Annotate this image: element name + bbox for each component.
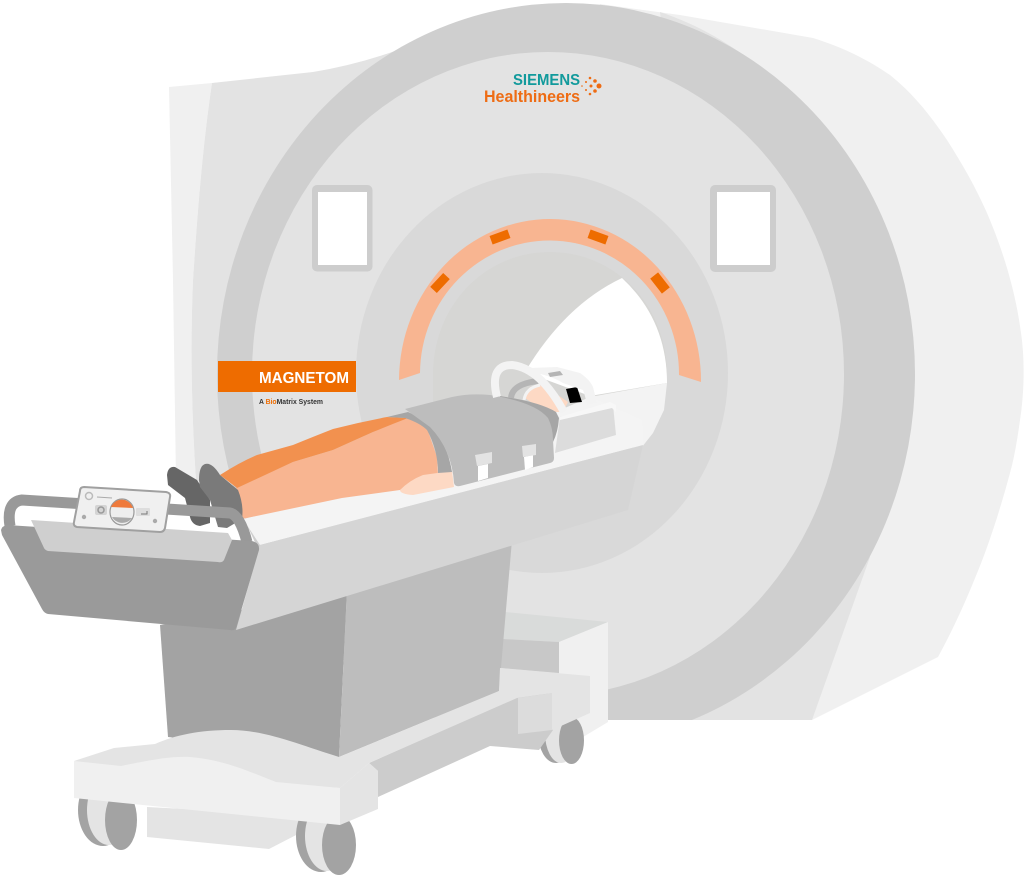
patient table top xyxy=(236,397,643,630)
left wheel xyxy=(78,774,137,850)
tray inset xyxy=(31,520,232,562)
socks xyxy=(167,464,242,528)
Siemens Healthineers logo: Healthineers xyxy=(484,87,580,106)
remote control xyxy=(74,487,170,532)
drape band xyxy=(387,412,452,473)
coil slot xyxy=(548,371,563,377)
arm side xyxy=(369,693,553,797)
head xyxy=(525,385,568,412)
coil front arc xyxy=(495,365,564,412)
tray body xyxy=(1,525,259,630)
handle xyxy=(9,500,247,542)
drape right band xyxy=(500,396,559,442)
front wheel xyxy=(296,800,356,875)
front face xyxy=(192,51,450,540)
bore interior xyxy=(433,252,667,470)
logo dots xyxy=(581,77,602,95)
center dial xyxy=(110,499,134,525)
head coil xyxy=(495,365,597,412)
label line xyxy=(97,497,112,498)
side button xyxy=(136,508,150,516)
black gap xyxy=(566,387,582,403)
foot and arm top xyxy=(74,668,590,788)
rear foot block xyxy=(503,612,608,642)
patient table base xyxy=(74,540,608,875)
scanner front housing xyxy=(169,3,915,745)
rotary button xyxy=(95,505,107,515)
rear wheel xyxy=(538,703,584,764)
orange coil arc xyxy=(399,219,701,382)
left side panel xyxy=(169,83,212,480)
foot front xyxy=(74,757,340,825)
table surface xyxy=(243,397,643,545)
inner disc xyxy=(252,52,844,696)
window: left xyxy=(312,185,372,272)
column left xyxy=(160,590,347,757)
upper leg shading xyxy=(220,417,408,488)
coil segments xyxy=(430,230,670,294)
coil inner arc xyxy=(524,385,540,400)
scanner rear shell xyxy=(600,4,1024,720)
Siemens Healthineers logo: SIEMENS xyxy=(513,72,580,89)
hand xyxy=(400,471,454,495)
foot side xyxy=(340,763,378,825)
grip marks xyxy=(82,515,86,519)
tagline: A BioMatrix System xyxy=(259,399,323,406)
arm block xyxy=(518,693,552,734)
bore light opening xyxy=(525,278,667,396)
MAGNETOM label xyxy=(218,361,356,406)
bore ring xyxy=(356,173,728,573)
MAGNETOM label: MAGNETOM xyxy=(259,370,349,387)
shell lower wedge xyxy=(610,557,870,720)
bore floor xyxy=(590,383,667,450)
coil back arc xyxy=(511,381,538,398)
Siemens Healthineers logo xyxy=(484,72,602,106)
coil top shell xyxy=(530,367,597,405)
buckle left xyxy=(475,452,492,481)
patient xyxy=(220,385,568,519)
footboard xyxy=(1,487,259,630)
column right xyxy=(339,540,512,757)
head support block xyxy=(555,402,616,453)
legs skin xyxy=(236,416,438,519)
outer ring xyxy=(217,3,915,745)
bore opening xyxy=(356,173,728,573)
shell upper crescent xyxy=(660,12,915,372)
under plate xyxy=(147,807,300,849)
buckle right xyxy=(522,444,536,470)
table side xyxy=(236,445,643,630)
power button xyxy=(86,492,92,500)
window: right xyxy=(710,185,776,272)
drape xyxy=(405,394,554,486)
